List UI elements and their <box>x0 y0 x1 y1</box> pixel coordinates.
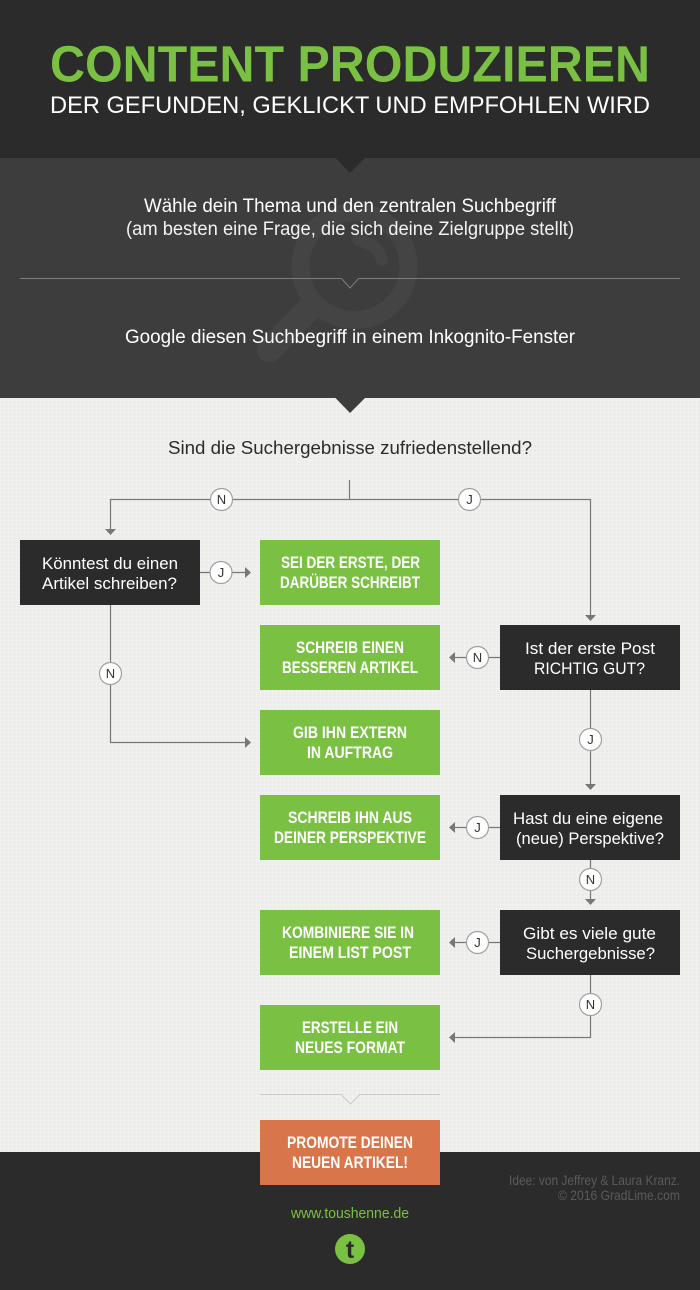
result box: new format <box>260 1005 440 1070</box>
result box: be the first <box>260 540 440 605</box>
title: CONTENT PRODUZIEREN <box>50 36 650 92</box>
arrow: many results yes <box>449 932 500 954</box>
arrow: header pointer <box>336 158 365 173</box>
badge: J: J <box>587 732 594 747</box>
arrow: could write yes <box>200 562 251 584</box>
arrow: perspective no <box>580 860 602 905</box>
arrow: perspective yes <box>449 816 500 838</box>
final box: promote: PROMOTE DEINEN <box>287 1133 413 1152</box>
text: choose topic <box>126 196 574 240</box>
result box: new format: ERSTELLE EIN <box>302 1018 398 1037</box>
badge: N: N <box>106 666 115 681</box>
question box: first post <box>500 625 680 690</box>
subtitle: DER GEFUNDEN, GEKLICKT UND EMPFOHLEN WIRD <box>50 92 650 119</box>
badge: N: N <box>217 492 226 507</box>
icon: logo t: t <box>346 1236 355 1264</box>
result box: list post: KOMBINIERE SIE IN <box>282 923 414 942</box>
result box: be the first: SEI DER ERSTE, DER <box>281 553 420 572</box>
badge: J: J <box>474 820 481 835</box>
result box: list post: EINEM LIST POST <box>289 943 412 962</box>
question box: first post: RICHTIG GUT? <box>534 660 645 678</box>
badge: J <box>458 488 480 510</box>
question box: own perspective: Hast du eine eigene <box>513 810 663 828</box>
badge: N: N <box>586 997 595 1012</box>
question box: many good results <box>500 910 680 975</box>
badge: J: J <box>474 935 481 950</box>
text: choose topic: Wähle dein Thema und den zentralen Suchbegriff <box>144 196 557 217</box>
question box: many good results: Suchergebnisse? <box>526 945 655 963</box>
panel: search steps <box>0 158 700 398</box>
panel: header <box>0 0 700 158</box>
result box: outsource <box>260 710 440 775</box>
badge: J: J <box>466 492 473 507</box>
result box: your perspective: DEINER PERSPEKTIVE <box>274 828 426 847</box>
panel: footer <box>0 1152 700 1290</box>
result box: outsource: GIB IHN EXTERN <box>293 723 407 742</box>
final box: promote <box>260 1120 440 1185</box>
result box: better article: SCHREIB EINEN <box>296 638 404 657</box>
question box: could you write: Artikel schreiben? <box>42 575 177 593</box>
icon: magnifying glass <box>269 212 408 350</box>
final box: promote: NEUEN ARTIKEL! <box>292 1153 408 1172</box>
badge: N <box>210 488 232 510</box>
question box: own perspective <box>500 795 680 860</box>
question box: many good results: Gibt es viele gute <box>523 925 656 943</box>
badge: N <box>580 994 602 1016</box>
result box: your perspective <box>260 795 440 860</box>
result box: outsource: IN AUFTRAG <box>307 743 393 762</box>
badge: N: N <box>473 650 482 665</box>
question box: own perspective: (neue) Perspektive? <box>516 830 664 848</box>
icon: logo t <box>335 1234 365 1264</box>
panel: flowchart background <box>0 398 700 1152</box>
badge: N <box>100 662 122 684</box>
result box: your perspective: SCHREIB IHN AUS <box>288 808 412 827</box>
badge: J: J <box>218 565 224 580</box>
arrow: first post no <box>449 646 500 668</box>
question box: first post: Ist der erste Post <box>525 640 655 658</box>
arrow: many results no <box>449 975 602 1043</box>
badge: N: N <box>586 872 595 887</box>
question box: could you write: Könntest du einen <box>42 555 178 573</box>
text: google the term: Google diesen Suchbegriff in einem Inkognito-Fenster <box>125 327 576 348</box>
question box: could you write <box>20 540 200 605</box>
arrow: panel pointer <box>336 398 365 413</box>
credits: © 2016 GradLime.com <box>558 1187 680 1203</box>
arrow: first post yes <box>580 690 602 790</box>
website link: www.toushenne.de <box>290 1206 409 1222</box>
result box: better article: BESSEREN ARTIKEL <box>282 658 418 677</box>
result box: be the first: DARÜBER SCHREIBT <box>280 573 420 592</box>
result box: list post <box>260 910 440 975</box>
arrow: could write no <box>100 605 251 748</box>
result box: new format: NEUES FORMAT <box>295 1038 405 1057</box>
credits <box>509 1172 680 1203</box>
text: choose topic: (am besten eine Frage, die sich deine Zielgruppe stellt) <box>126 219 574 240</box>
arrow: first split <box>105 480 596 621</box>
heading: question: Sind die Suchergebnisse zufriedenstellend? <box>168 437 532 458</box>
result box: better article <box>260 625 440 690</box>
